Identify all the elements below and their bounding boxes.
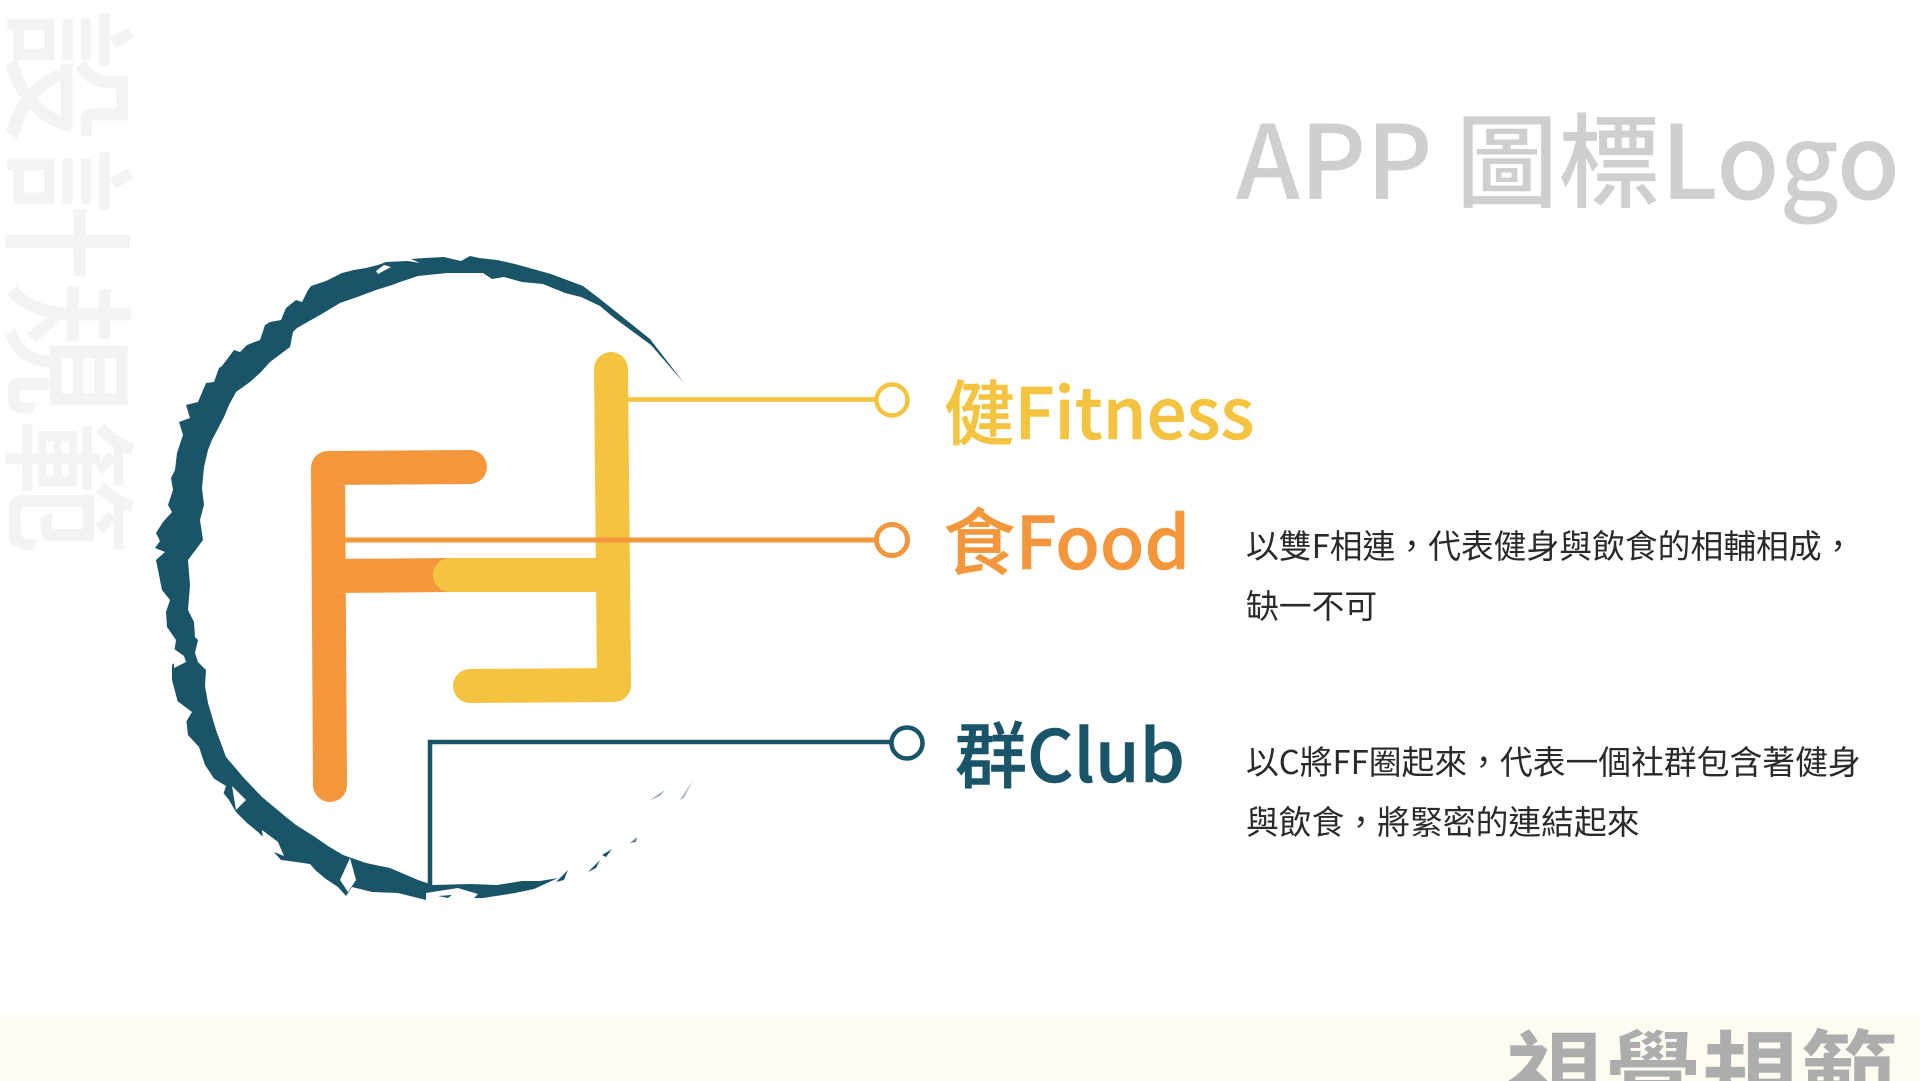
description: food: 以雙F相連，代表健身與飲食的相輔相成， <box>1246 521 1854 568</box>
logo: yellow F <box>450 369 614 686</box>
logo: orange F <box>328 467 470 785</box>
logo: brush circle C <box>155 256 684 900</box>
brush white cuts <box>170 265 478 906</box>
label: club: 群Club <box>955 698 1185 803</box>
page title: APP 圖標Logo <box>1236 80 1900 229</box>
description: club: 以C將FF圈起來，代表一個社群包含著健身 <box>1246 737 1861 784</box>
connector: food <box>345 524 908 556</box>
label: fitness: 健Fitness <box>944 358 1254 460</box>
description: club: 與飲食，將緊密的連結起來 <box>1246 797 1640 844</box>
label: food: 食Food <box>943 485 1190 590</box>
connector: fitness <box>628 384 908 416</box>
description: club <box>1246 737 1861 844</box>
connector: club <box>430 728 922 886</box>
description: food <box>1246 521 1854 628</box>
footer band with cropped heading <box>0 999 1920 1081</box>
description: food: 缺一不可 <box>1246 581 1377 628</box>
brush speckles <box>438 780 693 898</box>
